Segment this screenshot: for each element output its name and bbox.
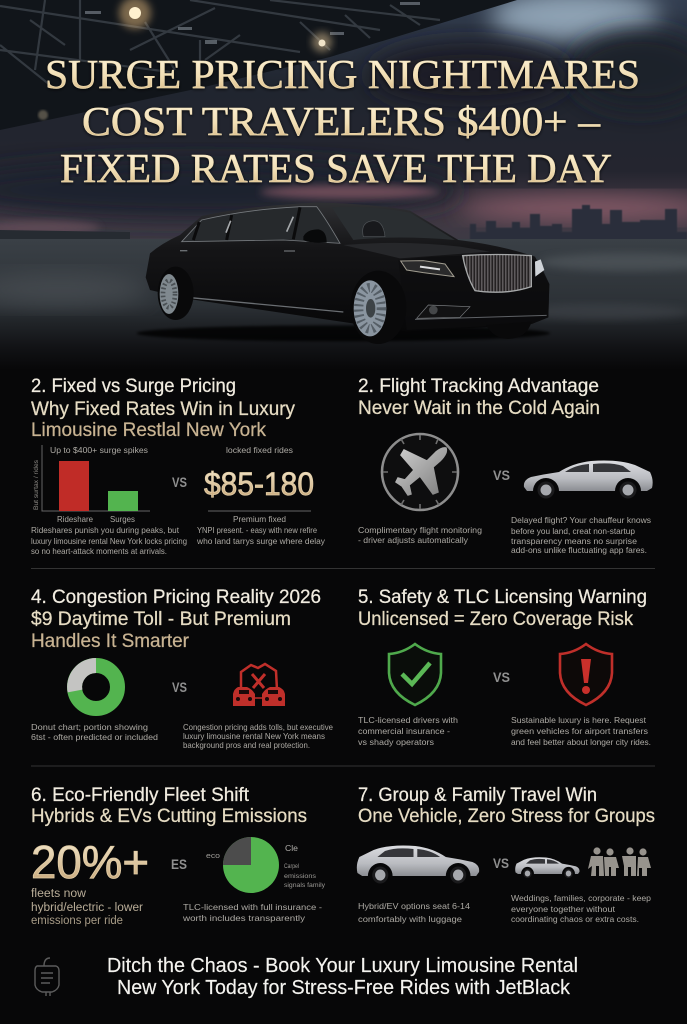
text: weddings and families: coordinating chaos or extra costs. [511, 914, 639, 924]
stat: 20 percent plus: 20%+ [31, 836, 149, 888]
heading: flight tracking: Never Wait in the Cold Again [358, 397, 600, 419]
stat: 20 percent plus: fleets now [31, 888, 87, 900]
text: flight monitoring: - driver adjusts automatically [358, 535, 469, 545]
icon: green shield with check [389, 644, 441, 705]
bar chart: rideshare vs surges: Up to $400+ surge spikes [50, 445, 148, 455]
heading: flight tracking [358, 375, 600, 419]
text: delayed flight: before you land, creat non-startup [511, 526, 635, 536]
text: delayed flight: transparency means no surprise [511, 536, 637, 546]
stat: 20 percent plus: hybrid/electric - lower [31, 902, 143, 914]
title [45, 51, 640, 191]
text: licensed drivers: TLC-licensed drivers with [358, 715, 458, 725]
text: rideshare explanation: luxury limousine rental New York locks pricing [31, 536, 187, 546]
panel: fixed vs surge pricing [31, 375, 326, 556]
icon: group of four people [588, 847, 651, 876]
heading: flight tracking: 2. Flight Tracking Advantage [358, 375, 599, 397]
vs label: VS [493, 467, 510, 483]
heading: group travel: One Vehicle, Zero Stress for Groups [358, 805, 655, 827]
stat: 20 percent plus [31, 836, 149, 927]
panel: safety and licensing [358, 586, 651, 747]
text: licensed drivers: commercial insurance - [358, 726, 450, 736]
heading: eco fleet: 6. Eco-Friendly Fleet Shift [31, 784, 250, 806]
fixed price stat [204, 445, 314, 524]
text: licensed insurance [182, 902, 322, 923]
text: rideshare explanation: so no heart-attack moments at arrivals. [31, 546, 167, 556]
heading: group travel [358, 784, 655, 827]
text: delayed flight: Delayed flight? Your chauffeur knows [511, 515, 651, 525]
heading: congestion pricing: 4. Congestion Pricing Reality 2026 [31, 586, 321, 608]
call to action: New York Today for Stress-Free Rides with JetBlack [117, 977, 571, 999]
text: licensed drivers: vs shady operators [358, 737, 434, 747]
heading: eco fleet [31, 784, 307, 827]
heading: fixed vs surge: 2. Fixed vs Surge Pricing [31, 375, 236, 397]
icon: clock with plane [382, 434, 458, 510]
text: fixed rate explanation [196, 525, 326, 546]
heading: safety: Unlicensed = Zero Coverage Risk [358, 608, 633, 630]
pie chart with labels [206, 837, 326, 893]
pie chart with labels: Cle [285, 843, 298, 853]
heading: fixed vs surge: Why Fixed Rates Win in Luxury [31, 398, 295, 420]
heading: congestion pricing: Handles It Smarter [31, 630, 189, 652]
bar chart: rideshare vs surges: But surtax / rides [33, 459, 40, 510]
donut chart [74, 666, 118, 708]
fixed price stat: Premium fixed [233, 514, 286, 524]
stat: 20 percent plus: emissions per ride [31, 915, 123, 927]
heading: group travel: 7. Group & Family Travel Win [358, 784, 597, 806]
text: sustainable luxury: and feel better about longer city rides. [511, 737, 651, 747]
panel: eco-friendly fleet [31, 784, 326, 927]
text: fixed rate explanation: who land tarrys surge where delay [196, 536, 326, 546]
heading: fixed vs surge [31, 375, 295, 441]
text: rideshare explanation [31, 525, 187, 556]
panel: flight tracking [358, 375, 653, 555]
text: weddings and families: everyone together without [511, 904, 616, 914]
text: hybrid seating [358, 901, 470, 924]
fixed price stat: $85-180 [204, 466, 314, 502]
text: congestion explanation: luxury limousine rental New York means [183, 731, 325, 741]
limousine windshield [332, 207, 455, 240]
vs label: VS [493, 855, 509, 871]
text: hybrid seating: comfortably with luggage [358, 914, 462, 924]
bar chart: rideshare vs surges: Rideshare [57, 514, 93, 524]
bar chart: rideshare vs surges: Surges [110, 514, 135, 524]
text: congestion explanation: background pros and real protection. [183, 740, 310, 750]
icon: footer document plug [35, 958, 59, 996]
heading: congestion pricing [31, 586, 321, 652]
text: donut caption [31, 722, 158, 742]
vs label: VS [493, 669, 510, 685]
vs label: ES [171, 856, 187, 872]
text: hybrid seating: Hybrid/EV options seat 6-14 [358, 901, 470, 911]
icon: red shield with exclamation [560, 644, 612, 705]
limousine wheels [158, 267, 532, 344]
text: delayed flight: add-ons unlike fluctuating app fares. [511, 545, 647, 555]
pie chart with labels: Carpel [284, 863, 299, 870]
text: weddings and families: Weddings, families, corporate - keep [511, 893, 651, 903]
panel: congestion pricing [31, 586, 333, 750]
fixed price stat: locked fixed rides [226, 445, 293, 455]
heading: fixed vs surge: Limousine Restlal New York [31, 419, 266, 441]
panel: group and family travel [357, 784, 655, 924]
text: fixed rate explanation: YNPI present. - easy with new refire [197, 525, 317, 535]
text: donut caption: 6tst - often predicted or included [31, 732, 158, 742]
icon: small sedan [515, 857, 580, 878]
heading: congestion pricing: $9 Daytime Toll - But Premium [31, 608, 291, 630]
title: FIXED RATES SAVE THE DAY [60, 145, 612, 191]
limousine side windows [182, 207, 340, 243]
text: sustainable luxury: Sustainable luxury is here. Request [511, 715, 647, 725]
text: rideshare explanation: Rideshares punish you during peaks, but [31, 525, 180, 535]
title: COST TRAVELERS $400+ – [82, 98, 601, 144]
bar chart: rideshare vs surges [33, 445, 150, 524]
text: flight monitoring: Complimentary flight monitoring [358, 525, 482, 535]
hero image: stormy sky, terminal truss and skyline [0, 0, 687, 370]
text: sustainable luxury [511, 715, 651, 747]
text: congestion explanation [183, 722, 333, 750]
text: licensed insurance: worth includes transparently [182, 913, 306, 923]
divider [31, 765, 655, 767]
text: licensed drivers [358, 715, 458, 747]
pie chart with labels: signals family [284, 882, 326, 889]
text: licensed insurance: TLC-licensed with full insurance - [183, 902, 322, 912]
heading: eco fleet: Hybrids & EVs Cutting Emissions [31, 805, 307, 827]
limousine headlights [401, 261, 454, 277]
heading: safety [358, 586, 647, 630]
icon: silver sedan facing left [524, 460, 653, 498]
icon: red cars with cross [233, 664, 285, 706]
vs label: VS [172, 474, 187, 490]
heading: safety: 5. Safety & TLC Licensing Warning [358, 586, 647, 608]
text: sustainable luxury: green vehicles for airport transfers [511, 726, 648, 736]
call to action [107, 955, 578, 999]
pie chart with labels: eco [206, 853, 220, 860]
pie chart with labels: emissions [284, 873, 317, 880]
title: SURGE PRICING NIGHTMARES [45, 51, 640, 97]
call to action: Ditch the Chaos - Book Your Luxury Limousine Rental [107, 955, 578, 977]
text: delayed flight [511, 515, 651, 555]
text: donut caption: Donut chart; portion showing [31, 722, 148, 732]
limousine grille [463, 254, 531, 292]
hero limousine [137, 203, 550, 344]
text: congestion explanation: Congestion pricing adds tolls, but executive [183, 722, 333, 732]
divider [31, 568, 655, 570]
vs label: VS [172, 679, 187, 695]
icon: silver sedan facing right [357, 846, 479, 884]
text: flight monitoring [358, 525, 482, 545]
text: weddings and families [511, 893, 651, 924]
